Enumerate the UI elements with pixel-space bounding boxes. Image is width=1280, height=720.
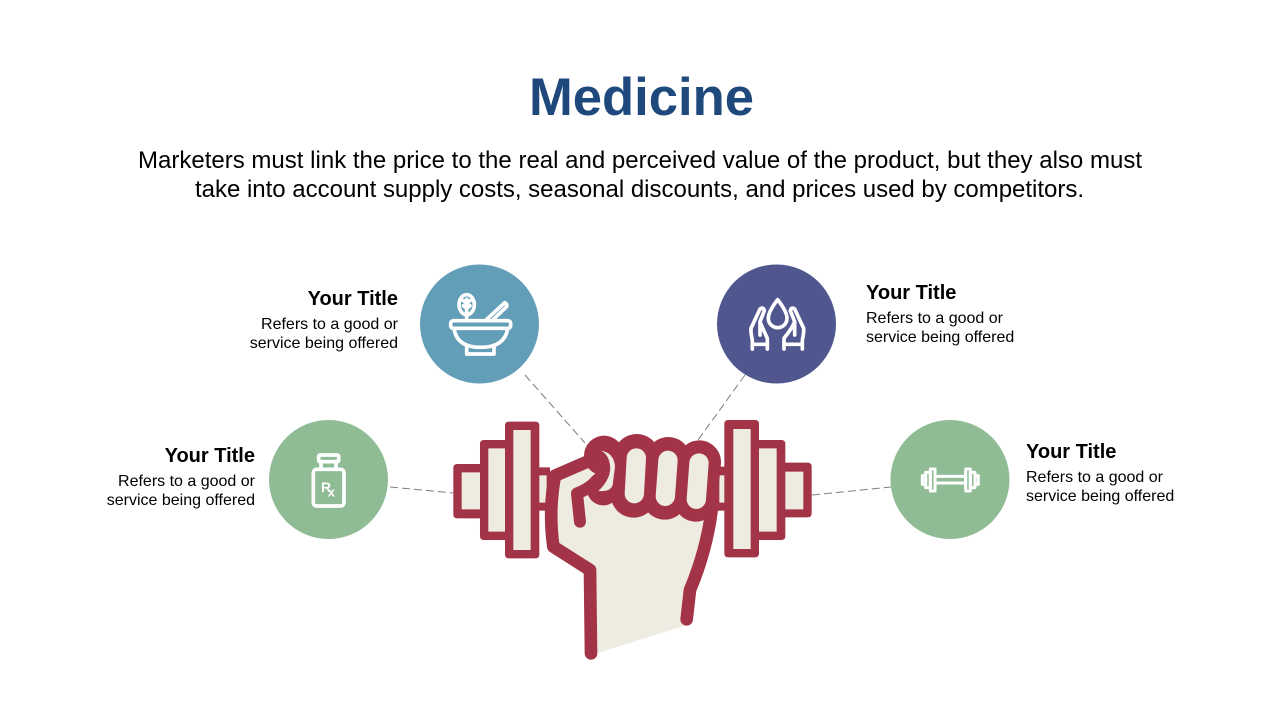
icon: hands holding drop bbox=[751, 300, 804, 349]
intro text: take into account supply costs, seasonal discounts, and prices used by competitors. bbox=[195, 176, 1084, 203]
circle: plant bowl bbox=[420, 264, 539, 384]
text block: lower right: service being offered bbox=[1026, 488, 1174, 505]
central illustration: hand lifting dumbbell bbox=[453, 420, 812, 653]
circle: hands and water drop bbox=[717, 264, 836, 384]
circle: dumbbell bbox=[890, 420, 1010, 539]
text block: lower left: Your Title bbox=[165, 445, 255, 467]
text block: lower left: Refers to a good or bbox=[118, 473, 255, 490]
thumb bbox=[577, 473, 603, 522]
text block: lower left: service being offered bbox=[107, 492, 255, 509]
hand fill bbox=[551, 458, 712, 653]
text block: top left: Refers to a good or bbox=[261, 316, 398, 333]
icon: Rx bottle: x bbox=[328, 485, 336, 500]
text block: top right bbox=[866, 282, 1014, 346]
icon: mortar bowl with leaf bbox=[451, 295, 511, 354]
right weights bbox=[717, 420, 812, 557]
text block: top left: service being offered bbox=[250, 335, 398, 352]
connector lines bbox=[390, 375, 891, 495]
text block: top right: Refers to a good or bbox=[866, 310, 1003, 327]
intro text bbox=[138, 147, 1142, 203]
text block: top right: service being offered bbox=[866, 329, 1014, 346]
icon: small dumbbell bbox=[922, 469, 978, 491]
text block: lower right: Your Title bbox=[1026, 441, 1116, 463]
text block: lower left bbox=[107, 445, 255, 509]
text block: top left bbox=[250, 288, 398, 352]
icon: Rx bottle bbox=[313, 455, 344, 506]
left weights bbox=[453, 422, 550, 558]
title: Medicine bbox=[529, 68, 754, 126]
hand outline bbox=[551, 458, 712, 653]
text block: lower right: Refers to a good or bbox=[1026, 469, 1163, 486]
circle: prescription bottle bbox=[269, 420, 388, 539]
text block: lower right bbox=[1026, 441, 1174, 505]
text block: top left: Your Title bbox=[308, 288, 398, 310]
icon: Rx bottle: R bbox=[321, 479, 331, 495]
intro text: Marketers must link the price to the real and perceived value of the product, but they also must bbox=[138, 147, 1142, 174]
fingers bbox=[577, 436, 699, 522]
text block: top right: Your Title bbox=[866, 282, 956, 304]
